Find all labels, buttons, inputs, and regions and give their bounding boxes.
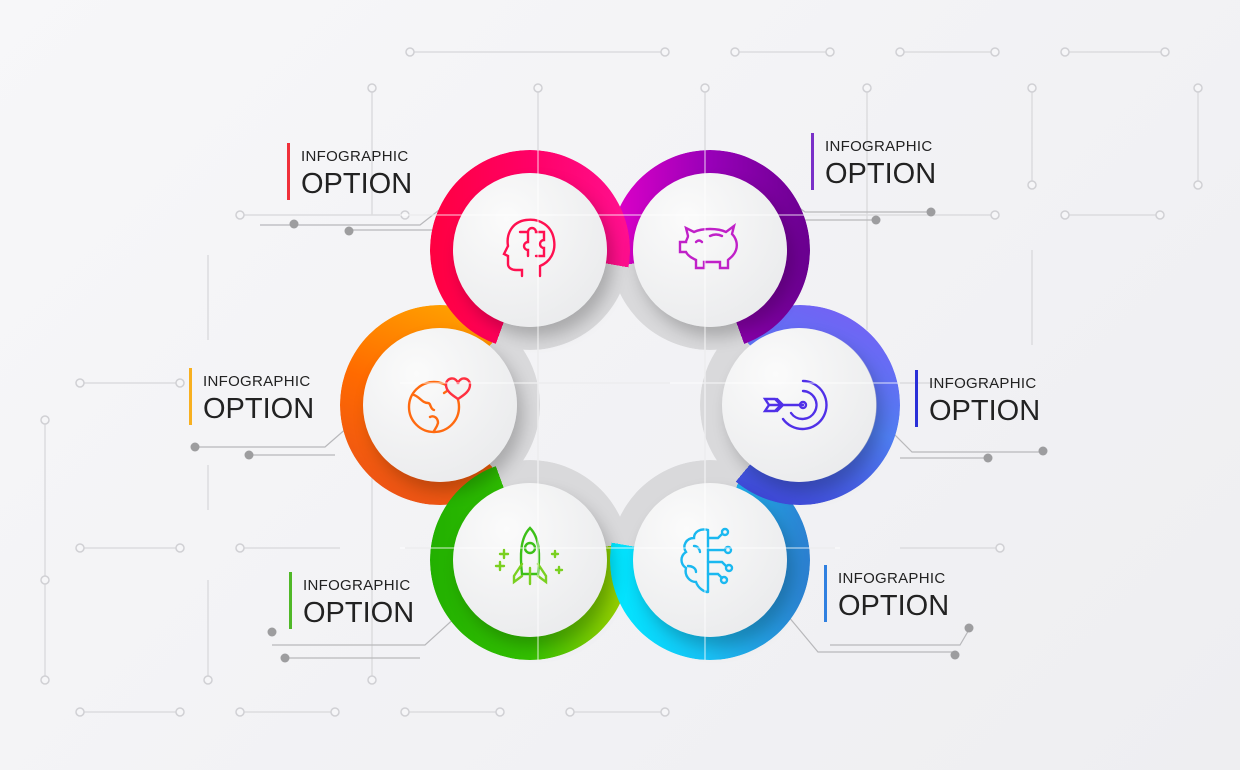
label: right: INFOGRAPHIC [929, 375, 1036, 392]
ring: purple [610, 150, 810, 350]
ring: orange [340, 305, 540, 505]
label: right: OPTION [929, 395, 1040, 427]
label: bottom right: INFOGRAPHIC [838, 570, 945, 587]
label: top right: OPTION [825, 158, 936, 190]
circle: purple piggy [633, 173, 787, 327]
label: left: OPTION [203, 393, 314, 425]
circle: pink head puzzle [453, 173, 607, 327]
label: bottom left: OPTION [303, 597, 414, 629]
circle: orange globe [363, 328, 517, 482]
label: left [189, 368, 314, 425]
label: top left: OPTION [301, 168, 412, 200]
label: left: INFOGRAPHIC [203, 373, 310, 390]
label: top left [287, 143, 412, 200]
label: top left: INFOGRAPHIC [301, 148, 408, 165]
ring: blue [700, 305, 900, 505]
ring: pink [430, 150, 630, 350]
circle: blue target [722, 328, 876, 482]
label: bottom left [289, 572, 414, 629]
label: top right: INFOGRAPHIC [825, 138, 932, 155]
label: bottom right: OPTION [838, 590, 949, 622]
ring: green [430, 460, 630, 660]
ring: cyan [610, 460, 810, 660]
label: bottom left: INFOGRAPHIC [303, 577, 410, 594]
circle: cyan brain [633, 483, 787, 637]
label: right [915, 370, 1040, 427]
circle: green rocket [453, 483, 607, 637]
label: top right [811, 133, 936, 190]
label: bottom right [824, 565, 949, 622]
